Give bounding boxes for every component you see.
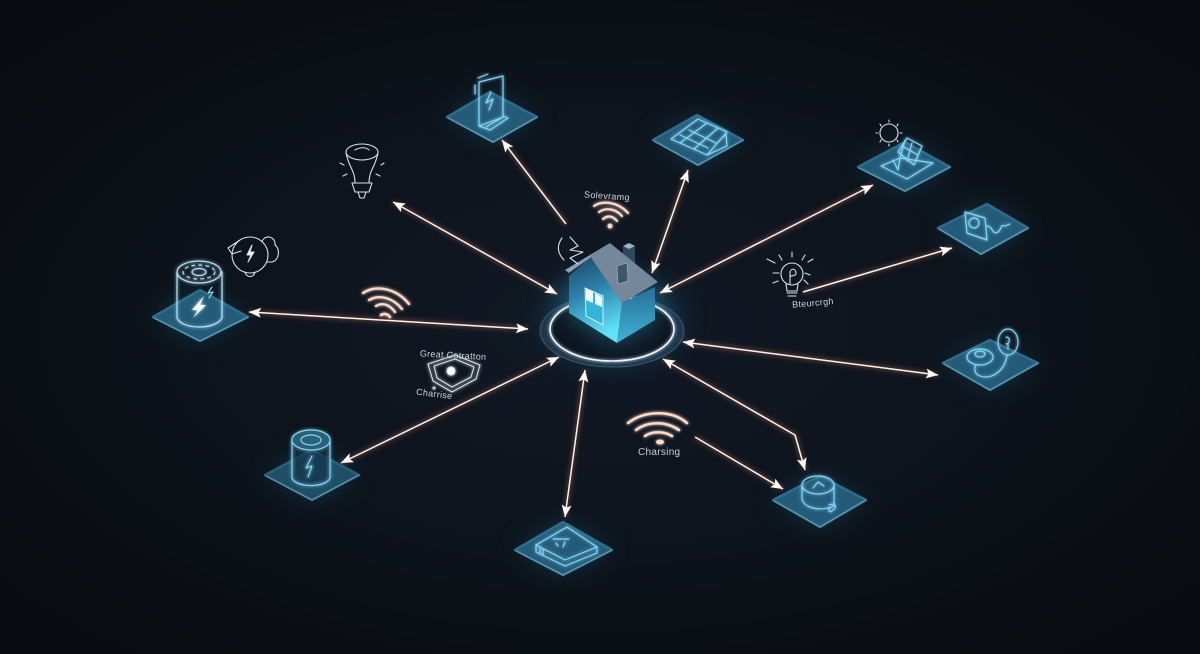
arrow: to lower-left battery: [341, 357, 559, 463]
icon: idea bulb: [767, 252, 813, 296]
arrow: charging to meter: [695, 437, 783, 489]
chimney cap: [623, 243, 635, 249]
icon: round meter: [802, 476, 836, 512]
icon: shield: [428, 355, 480, 392]
icon: plug and cable: [965, 212, 1010, 240]
chimney front: [617, 263, 628, 284]
icon: disc with cable: [967, 329, 1018, 377]
platform glows: [153, 92, 1038, 575]
roof left edge: [565, 243, 610, 273]
platform: wall plug: [938, 204, 1028, 254]
arrow: bent to meter: [663, 359, 805, 470]
wifi: left: [363, 289, 409, 317]
icon: phone: [475, 74, 508, 130]
platform: box: [515, 522, 612, 575]
icon: smart speaker battery: [177, 261, 222, 327]
arrow: to disc: [683, 342, 938, 375]
hub glowing ring: [550, 297, 674, 361]
roof: [590, 243, 658, 303]
icon: router box: [536, 527, 597, 566]
icon: small bolt: [208, 287, 213, 298]
arrow: to sun panel: [660, 185, 873, 293]
icon: solar grid: [671, 119, 727, 155]
wifi: top: [594, 203, 628, 228]
icon: sun and panel: [881, 138, 933, 179]
house right wall: [617, 287, 655, 343]
platform: left battery: [153, 261, 248, 341]
hub ring base: [540, 295, 684, 367]
arrow: to left battery: [249, 312, 528, 329]
icon: leaf squiggle: [558, 237, 583, 264]
icon: sun: [876, 120, 902, 146]
window: [585, 288, 603, 325]
arrow: to phone: [502, 140, 566, 224]
platform: solar panel: [653, 115, 743, 165]
icon: light bulb top left: [340, 144, 384, 198]
label: idea bulb: Bteurcrgh: [792, 296, 834, 310]
house glow: [569, 280, 655, 343]
central hub: house on ring: [540, 243, 684, 367]
arrow: to bulb: [393, 202, 557, 294]
icon: large bolt: [192, 296, 206, 318]
platform: phone: [447, 74, 537, 142]
label: top wifi: Solevramg: [584, 189, 630, 203]
icon: battery cylinder: [292, 430, 330, 486]
platform: lower-left battery: [265, 430, 359, 500]
label: shield title: Great Cotratton: [420, 348, 487, 362]
hub inner disc: [550, 297, 674, 361]
platform: meter: [773, 476, 866, 527]
label: charging: Charsing: [638, 447, 680, 458]
icon: bulb with cloud: [228, 237, 278, 276]
wifi: bottom: [628, 413, 687, 444]
platform: headset: [943, 329, 1038, 390]
connector glow: [249, 140, 952, 517]
arrow: to solar panel: [652, 170, 688, 273]
chimney back: [623, 246, 635, 268]
arrow: bulb to plug: [803, 248, 952, 292]
platform: solar with sun: [858, 120, 950, 191]
label: shield caption: Charrise: [416, 387, 453, 401]
house left wall: [569, 256, 622, 343]
arrow: to box: [565, 370, 585, 517]
